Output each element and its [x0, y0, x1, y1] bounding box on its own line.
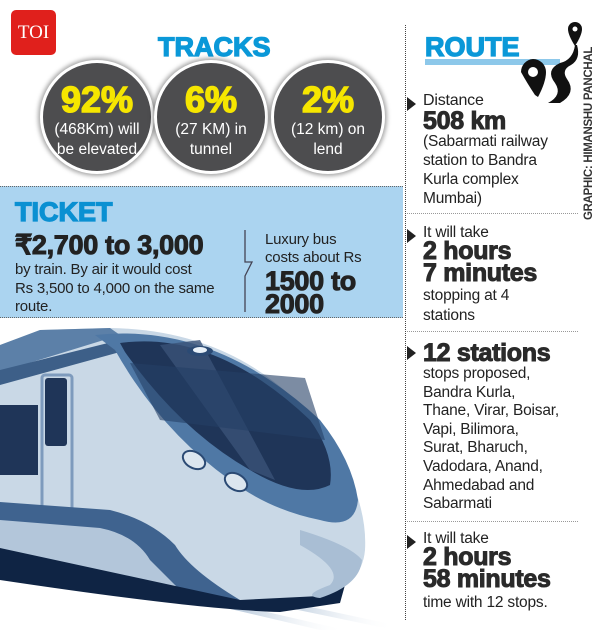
bus fare: 1500 to: [265, 266, 356, 296]
route heading: ROUTE: [425, 32, 520, 62]
air fare text: Rs 3,500 to 4,000 on the same: [15, 280, 214, 296]
circle: 2% land: [271, 60, 385, 174]
separator: [244, 230, 253, 312]
circle: 6% tunnel: 6%: [185, 79, 237, 120]
text: Kurla complex: [423, 171, 519, 188]
circle: 92% elevated: [40, 60, 154, 174]
text: 508 km: [423, 107, 506, 135]
TOI logo: TOI: [18, 22, 49, 43]
text: 12 stations: [423, 339, 550, 367]
train illustration: [0, 328, 366, 626]
vertical dotted divider: [405, 25, 406, 620]
text: (Sabarmati railway: [423, 133, 548, 150]
text: Sabarmati: [423, 495, 492, 512]
text: 2 hours: [423, 237, 511, 265]
text: stations: [423, 307, 475, 324]
credit: GRAPHIC: HIMANSHU PANCHAL: [583, 47, 595, 220]
circle: 6% tunnel: tunnel: [190, 141, 232, 158]
text: stops proposed,: [423, 365, 530, 382]
circle: 92% elevated: be elevated: [57, 141, 137, 158]
circle: 2% land: lend: [313, 141, 343, 158]
circle: 6% tunnel: (27 KM) in: [175, 121, 247, 138]
circle: 6% tunnel: [154, 60, 268, 174]
train fare: ₹2,700 to 3,000: [15, 230, 203, 260]
air fare text: [15, 261, 214, 315]
circle: 2% land: (12 km) on: [291, 121, 365, 138]
bus fare: [265, 231, 362, 319]
route: time with 12 stops: [407, 530, 551, 611]
TOI logo: [11, 10, 56, 55]
circle: 2% land: 2%: [302, 79, 354, 120]
bus fare: 2000: [265, 289, 324, 319]
text: station to Bandra: [423, 152, 537, 169]
text: It will take: [423, 530, 489, 547]
route heading: [425, 32, 560, 65]
panel: ticket: [0, 186, 403, 318]
ticket heading: TICKET: [15, 197, 112, 227]
route: time with 4 stops: [407, 224, 537, 324]
text: 58 minutes: [423, 565, 551, 593]
text: Distance: [423, 92, 484, 109]
text: Mumbai): [423, 190, 482, 207]
text: Vadodara, Anand,: [423, 458, 543, 475]
text: It will take: [423, 224, 489, 241]
text: Vapi, Bilimora,: [423, 421, 519, 438]
icon: route pins: [521, 22, 582, 103]
text: 7 minutes: [423, 259, 537, 287]
route: 12 stations: [407, 339, 559, 512]
air fare text: by train. By air it would cost: [15, 261, 192, 278]
text: stopping at 4: [423, 287, 509, 304]
text: 2 hours: [423, 543, 511, 571]
air fare text: route.: [15, 298, 52, 315]
route: distance: [407, 92, 548, 207]
text: Thane, Virar, Boisar,: [423, 402, 559, 419]
tracks heading: TRACKS: [158, 32, 270, 62]
bus fare: costs about Rs: [265, 249, 361, 266]
text: Surat, Bharuch,: [423, 439, 528, 456]
text: Bandra Kurla,: [423, 384, 515, 401]
circle: 92% elevated: (468Km) will: [54, 121, 140, 138]
bus fare: Luxury bus: [265, 231, 336, 248]
circle: 92% elevated: 92%: [61, 79, 133, 120]
text: time with 12 stops.: [423, 594, 548, 611]
text: Ahmedabad and: [423, 477, 534, 494]
